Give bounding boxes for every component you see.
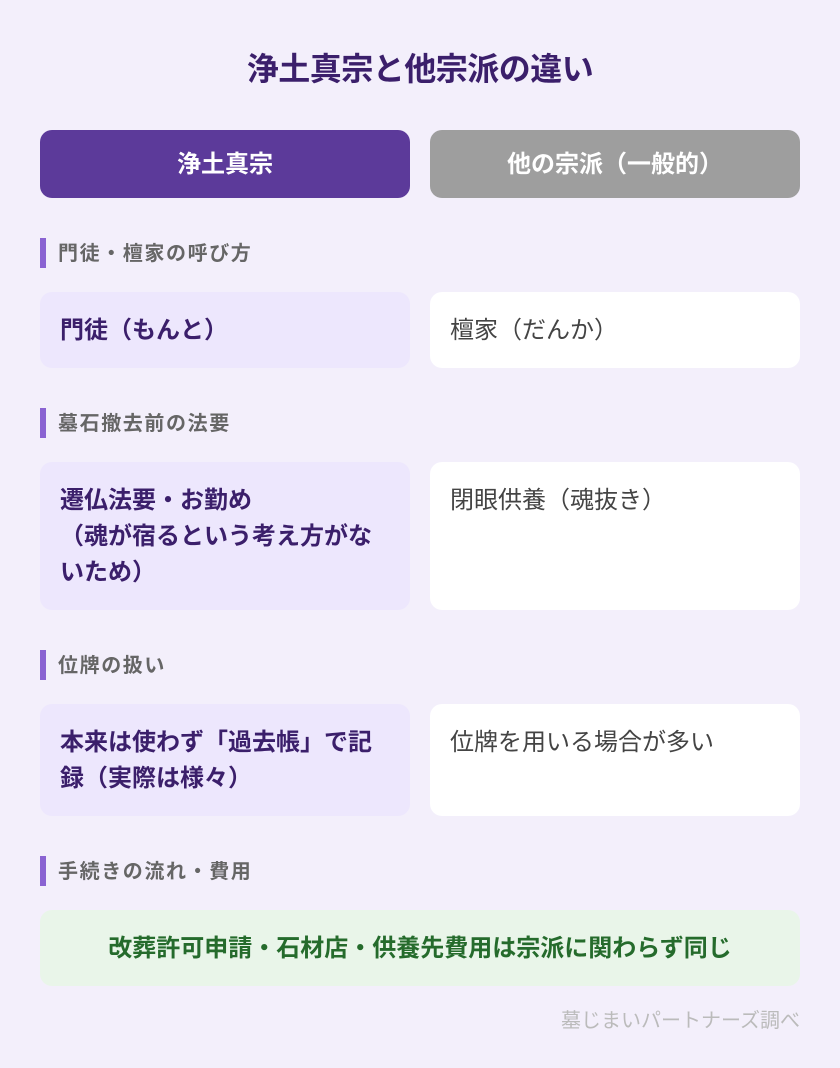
section label: 呼び方: 門徒・檀家の呼び方	[58, 243, 252, 265]
cell: 浄土真宗 位牌	[40, 704, 410, 816]
cell: 浄土真宗 呼び方	[40, 292, 410, 368]
section label: 手続き	[40, 856, 800, 886]
source credit: 墓じまいパートナーズ調べ	[561, 1010, 800, 1032]
section label: 呼び方	[40, 238, 800, 268]
title: 浄土真宗と他宗派の違い	[247, 51, 593, 87]
cell: 他宗派 法要: 閉眼供養（魂抜き）	[450, 487, 666, 514]
column header: 他の宗派	[430, 130, 800, 198]
cell: 浄土真宗 法要: （魂が宿るという考え方がないため）	[60, 523, 372, 586]
section label: 法要: 墓石撤去前の法要	[58, 413, 231, 435]
column header: 他の宗派: 他の宗派（一般的）	[507, 151, 723, 178]
callout: common note	[40, 910, 800, 986]
section label: 位牌	[40, 650, 800, 680]
column header: 浄土真宗: 浄土真宗	[177, 151, 273, 178]
cell: 他宗派 呼び方	[430, 292, 800, 368]
section label: 位牌: 位牌の扱い	[58, 655, 166, 677]
cell: 他宗派 位牌: 位牌を用いる場合が多い	[450, 729, 714, 756]
cell: 他宗派 呼び方: 檀家（だんか）	[450, 317, 618, 344]
cell: 浄土真宗 法要: 遷仏法要・お勤め	[60, 487, 252, 514]
cell: 浄土真宗 位牌: 本来は使わず「過去帳」で記録（実際は様々）	[60, 729, 372, 792]
callout: common note: 改葬許可申請・石材店・供養先費用は宗派に関わらず同じ	[108, 935, 732, 962]
cell: 他宗派 位牌	[430, 704, 800, 816]
section label: 法要	[40, 408, 800, 438]
section label: 手続き: 手続きの流れ・費用	[58, 861, 252, 883]
column header: 浄土真宗	[40, 130, 410, 198]
cell: 他宗派 法要	[430, 462, 800, 610]
cell: 浄土真宗 呼び方: 門徒（もんと）	[60, 317, 228, 344]
cell: 浄土真宗 法要	[40, 462, 410, 610]
